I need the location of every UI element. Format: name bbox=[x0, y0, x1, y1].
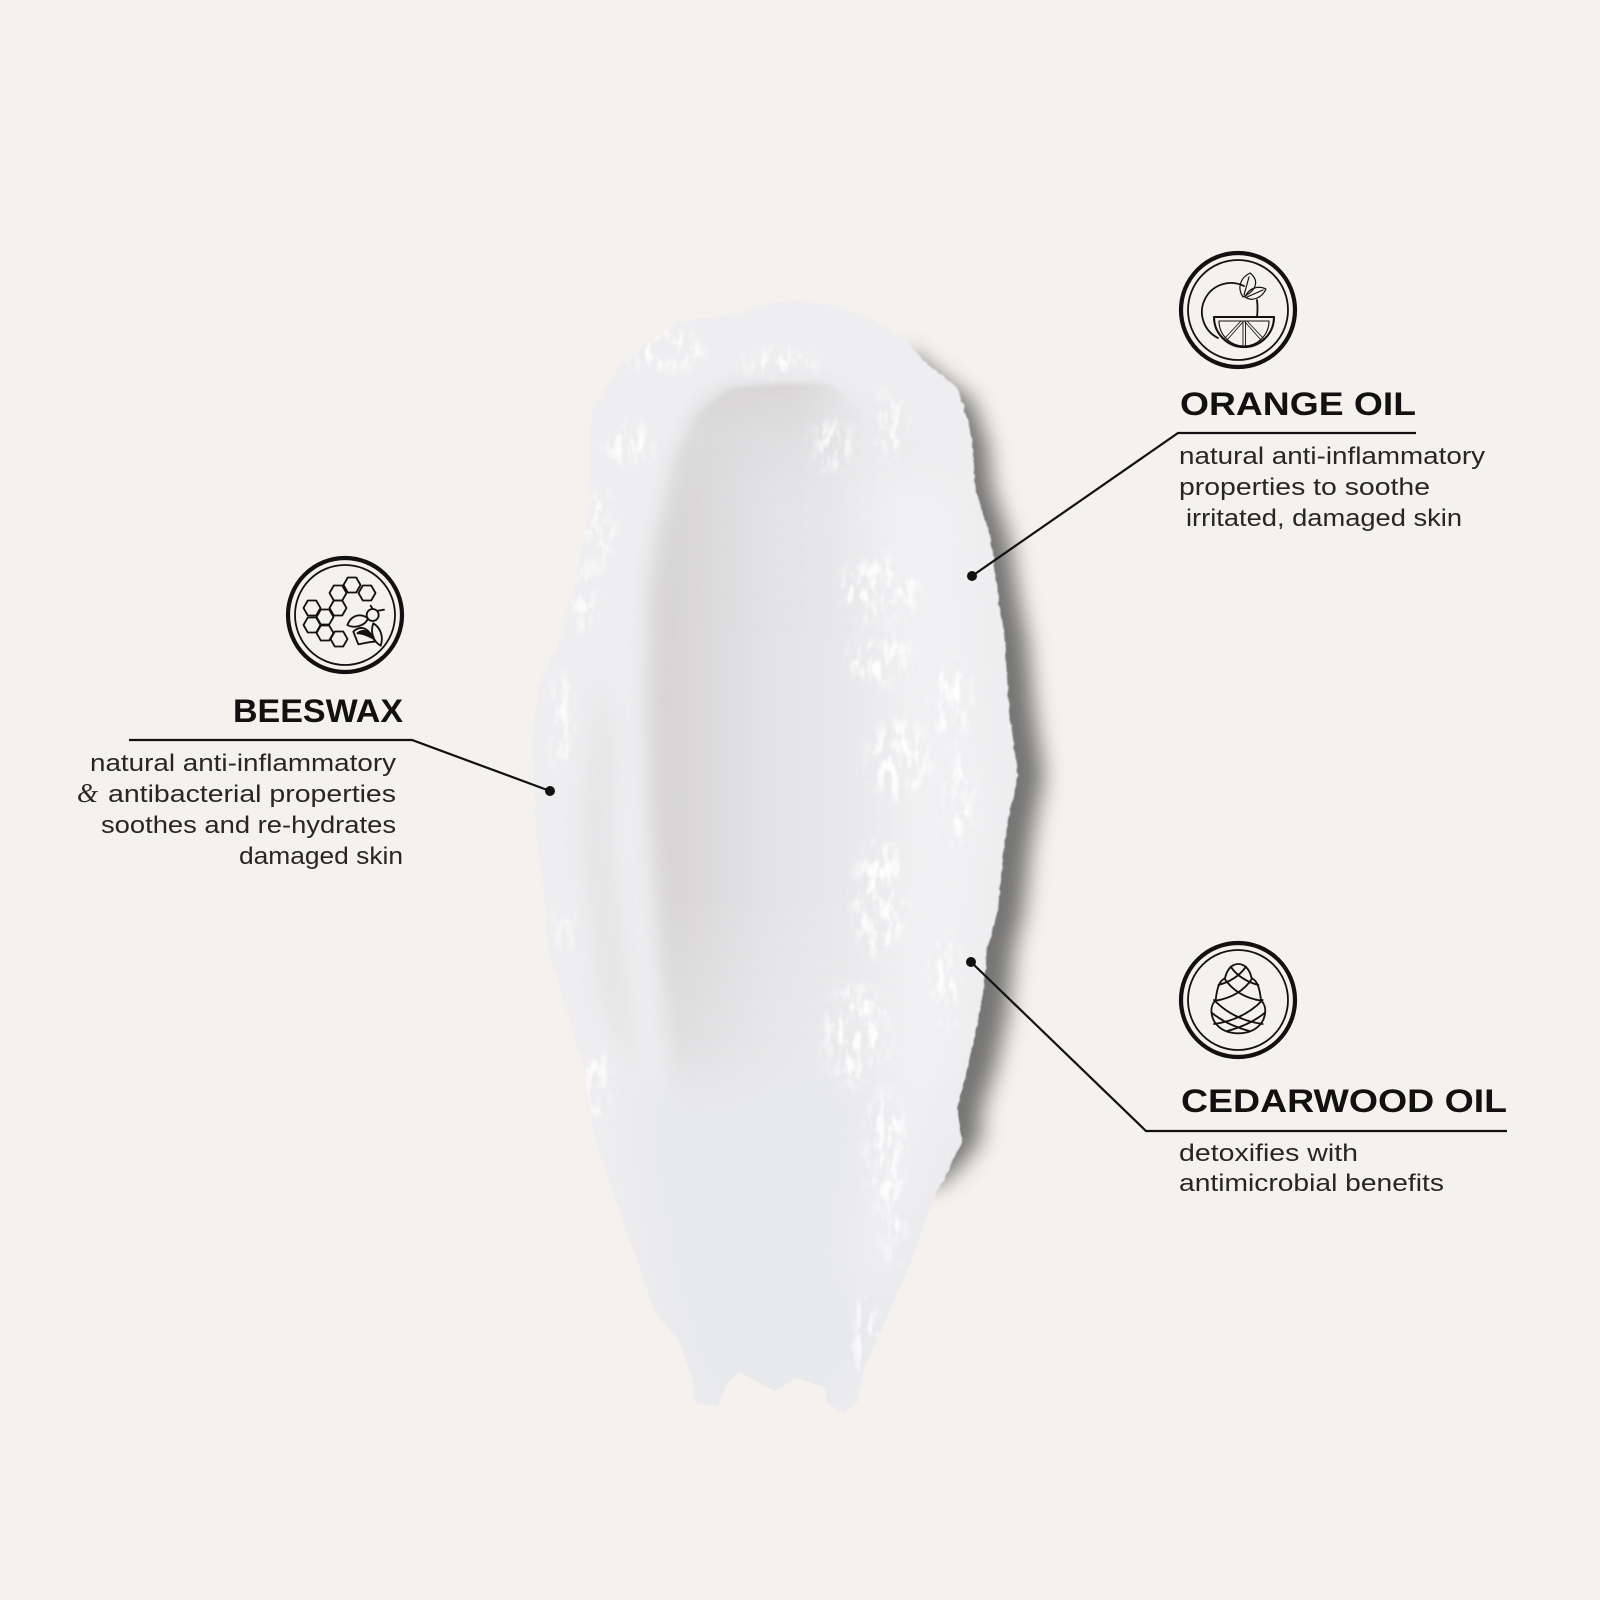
leader line: beeswax bbox=[129, 740, 555, 796]
description: beeswax: & bbox=[77, 778, 98, 808]
description: cedarwood oil: detoxifies with bbox=[1179, 1140, 1358, 1167]
swatch body bbox=[532, 300, 1018, 1414]
description: cedarwood oil bbox=[1179, 1140, 1444, 1197]
soft left band bbox=[590, 767, 620, 1012]
leader line: cedarwood oil bbox=[966, 957, 1507, 1131]
description: orange oil: natural anti-inflammatory bbox=[1179, 443, 1486, 470]
lower swatch wash bbox=[725, 1083, 964, 1390]
product swatch: white balm smear bbox=[532, 300, 1044, 1420]
heading: beeswax: BEESWAX bbox=[233, 693, 404, 729]
icon: pine cone bbox=[1181, 943, 1295, 1057]
description: beeswax bbox=[77, 750, 403, 870]
infographic canvas bbox=[78, 250, 1507, 1412]
callout: orange oil bbox=[967, 253, 1486, 581]
callout: beeswax bbox=[77, 558, 555, 870]
swatch inner shading bbox=[552, 330, 985, 1420]
description: beeswax: soothes and re-hydrates bbox=[101, 812, 396, 839]
description: beeswax: natural anti-inflammatory bbox=[90, 750, 397, 777]
description: cedarwood oil: antimicrobial benefits bbox=[1179, 1170, 1444, 1197]
leader line: orange oil bbox=[967, 433, 1416, 581]
icon: orange and slice bbox=[1181, 253, 1295, 367]
hollow scoop bbox=[642, 450, 803, 1076]
callout: cedarwood oil bbox=[966, 943, 1507, 1197]
description: orange oil bbox=[1179, 443, 1486, 532]
description: beeswax: damaged skin bbox=[239, 843, 403, 870]
icon: honeycomb and bee bbox=[288, 558, 402, 672]
hollow crisp top edge bbox=[648, 383, 950, 1330]
description: orange oil: irritated, damaged skin bbox=[1186, 505, 1462, 532]
heading: orange oil: ORANGE OIL bbox=[1180, 386, 1416, 422]
bright right ridge bbox=[957, 490, 1006, 1106]
swatch drop shadow on right edge bbox=[880, 348, 1044, 1190]
heading: cedarwood oil: CEDARWOOD OIL bbox=[1181, 1083, 1507, 1119]
description: beeswax: antibacterial properties bbox=[108, 781, 396, 808]
hollow top shading bbox=[714, 382, 833, 434]
gloss highlights bbox=[552, 330, 974, 1375]
description: orange oil: properties to soothe bbox=[1179, 474, 1430, 501]
